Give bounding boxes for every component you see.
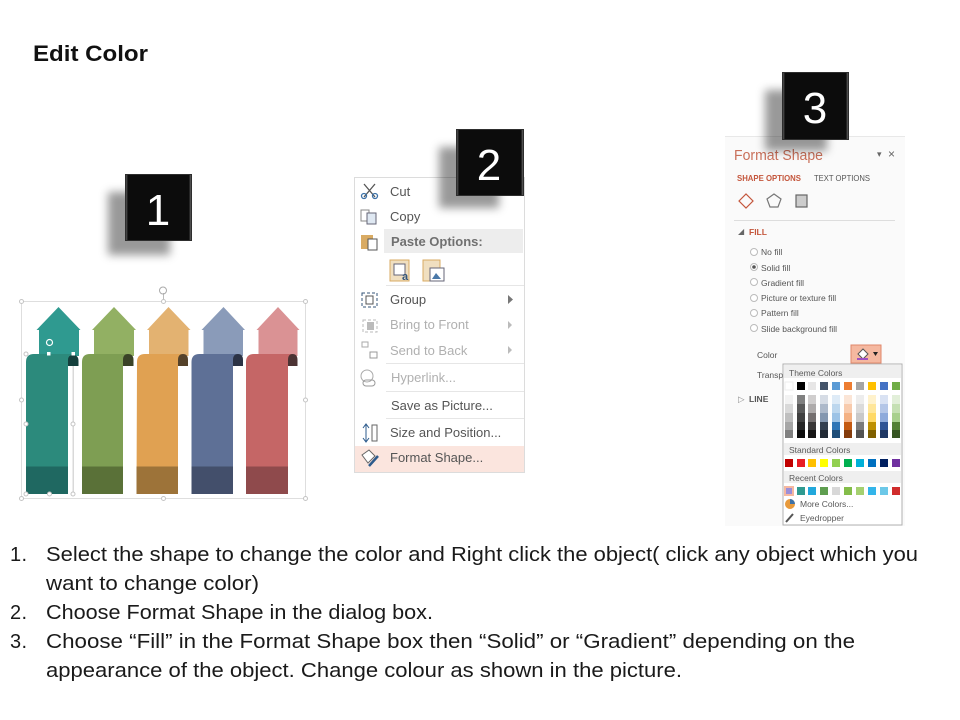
fill options: Solid fill	[761, 263, 790, 273]
recent colors	[784, 486, 900, 496]
number badge 2	[439, 130, 524, 208]
pane title: Format Shape	[734, 148, 823, 164]
panel: step 3 format shape pane	[725, 136, 905, 526]
instructions list: want to change color)	[45, 573, 259, 595]
arrow column: red	[246, 307, 300, 494]
fill options: ▷	[738, 394, 745, 404]
menu labels	[390, 184, 501, 465]
color dropdown: Theme Colors	[789, 368, 842, 378]
fill options: Color	[757, 350, 777, 360]
radio buttons	[750, 248, 758, 332]
menu icons: a	[402, 271, 409, 283]
panel: step 2 context menu	[354, 178, 524, 472]
number badge 3: 3	[803, 84, 827, 133]
icon: eyedropper	[786, 514, 793, 522]
menu labels: Hyperlink...	[391, 370, 456, 385]
instructions list: 3.	[10, 631, 27, 653]
instructions list: appearance of the object. Change colour as shown in the picture.	[46, 660, 682, 682]
menu labels: Bring to Front	[390, 317, 469, 332]
icon: color wheel	[785, 499, 795, 509]
menu labels: Paste Options:	[391, 234, 483, 249]
arrow column: teal	[26, 307, 80, 494]
pane tabs: SHAPE OPTIONS	[737, 173, 801, 183]
menu icons	[361, 184, 444, 466]
instructions list: Choose Format Shape in the dialog box.	[46, 602, 433, 624]
pane icons	[739, 194, 807, 208]
number badge 1	[108, 174, 192, 255]
menu arrows	[508, 295, 513, 354]
instructions list: Select the shape to change the color and Right click the object( click any object which you	[46, 544, 918, 566]
fill options: No fill	[761, 247, 782, 257]
instructions list: 1.	[10, 544, 27, 566]
fill options	[738, 227, 837, 404]
fill options: LINE	[749, 394, 769, 404]
color dropdown: Eyedropper	[800, 513, 844, 523]
panel: step 3 format shape pane: ×	[888, 147, 895, 161]
arrow column: orange	[136, 307, 190, 494]
menu labels: Format Shape...	[390, 450, 483, 465]
number badge 3	[765, 72, 848, 151]
fill options: FILL	[749, 227, 767, 237]
menu labels: Size and Position...	[390, 425, 501, 440]
menu dividers	[386, 286, 524, 418]
fill options: Transparency	[757, 370, 809, 380]
menu labels: Group	[390, 292, 426, 307]
panel: step 3 format shape pane: TEXT OPTIONS	[814, 173, 870, 183]
theme shades	[785, 395, 900, 438]
color dropdown: Standard Colors	[789, 445, 850, 455]
color button	[851, 345, 881, 363]
color dropdown: More Colors...	[800, 499, 853, 509]
menu labels: Copy	[390, 209, 421, 224]
fill options: Pattern fill	[761, 308, 799, 318]
arrow column: blue	[192, 307, 245, 494]
menu labels: Cut	[390, 184, 411, 199]
fill options: Gradient fill	[761, 278, 804, 288]
fill options: Slide background fill	[761, 324, 837, 334]
instructions list	[10, 544, 918, 682]
instructions list: Choose “Fill” in the Format Shape box then “Solid” or “Gradient” depending on the	[46, 631, 855, 653]
panel: step 3 format shape pane: ▾	[877, 149, 882, 159]
standard colors	[785, 459, 900, 467]
color dropdown	[783, 364, 902, 525]
title: Edit Color	[33, 41, 148, 66]
color dropdown: Recent Colors	[789, 473, 843, 483]
selection frame	[20, 287, 308, 500]
panel: step 1 selected shapes	[20, 287, 308, 500]
theme colors row	[785, 382, 900, 390]
instructions list: 2.	[10, 602, 27, 624]
arrow column: green	[82, 307, 136, 494]
menu labels: Send to Back	[390, 343, 468, 358]
menu labels: Save as Picture...	[391, 398, 493, 413]
fill options: Picture or texture fill	[761, 293, 836, 303]
selection handles	[24, 352, 75, 496]
number badge 2: 2	[477, 141, 501, 190]
number badge 1: 1	[146, 186, 170, 235]
fill options: ◢	[738, 227, 745, 236]
